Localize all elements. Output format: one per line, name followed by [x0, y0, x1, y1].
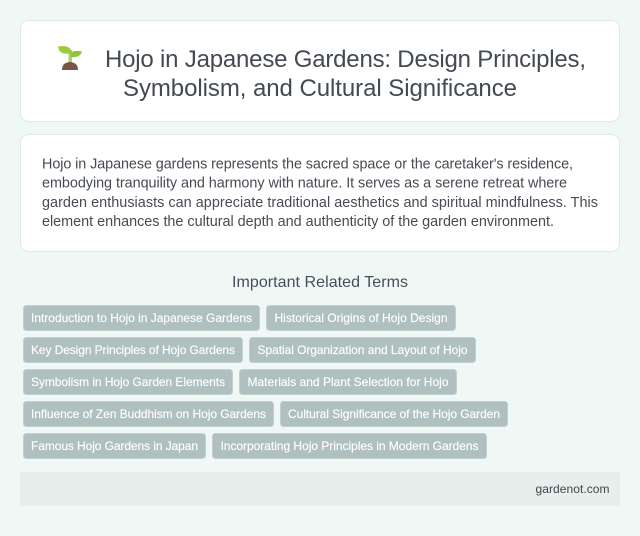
text block: description: embodying tranquility and harmony with nature. It serves as a serene retreat where: [42, 176, 567, 192]
text: source: gardenot.com: [536, 482, 610, 496]
chip: materials and plants: [240, 370, 456, 394]
chip: spatial organization: [250, 338, 476, 362]
panel: related term chips: [24, 306, 508, 458]
title: Hojo in Japanese Gardens: Design Principles,: [105, 46, 586, 73]
title: Symbolism, and Cultural Significance: [123, 75, 517, 102]
text block: description: [42, 156, 598, 230]
panel: description card: [20, 134, 620, 252]
chip: historical origins: Historical Origins of Hojo Design: [274, 311, 448, 325]
chip: zen influence: Influence of Zen Buddhism on Hojo Gardens: [31, 407, 266, 421]
panel: title card: [20, 20, 620, 122]
chip: spatial organization: Spatial Organization and Layout of Hojo: [258, 343, 468, 357]
chip: modern gardens: [212, 434, 486, 458]
chip: famous gardens: [24, 434, 206, 458]
chip: cultural significance: [280, 402, 508, 426]
chip: introduction: Introduction to Hojo in Japanese Gardens: [31, 311, 252, 325]
footer: [20, 472, 620, 506]
chip: cultural significance: Cultural Significance of the Hojo Garden: [288, 407, 500, 421]
text block: description: element enhances the cultural depth and authenticity of the garden environment.: [42, 214, 554, 230]
chip: symbolism: [24, 370, 232, 394]
chip: modern gardens: Incorporating Hojo Principles in Modern Gardens: [220, 439, 478, 453]
chip: introduction: [24, 306, 260, 330]
chip: key design principles: [24, 338, 242, 362]
chip: zen influence: [24, 402, 274, 426]
text block: description: Hojo in Japanese gardens represents the sacred space or the caretaker's residence,: [42, 156, 573, 172]
icon: seedling: [58, 46, 82, 70]
chip: symbolism: Symbolism in Hojo Garden Elements: [31, 375, 225, 389]
chip: famous gardens: Famous Hojo Gardens in Japan: [31, 439, 198, 453]
heading: related terms: Important Related Terms: [232, 274, 408, 291]
text block: description: garden enthusiasts can appreciate traditional aesthetics and spiritual mindfulness. This: [42, 195, 598, 211]
chip: historical origins: [266, 306, 456, 330]
chip: key design principles: Key Design Principles of Hojo Gardens: [31, 343, 235, 357]
chip: materials and plants: Materials and Plant Selection for Hojo: [248, 375, 449, 389]
title: [105, 46, 586, 102]
